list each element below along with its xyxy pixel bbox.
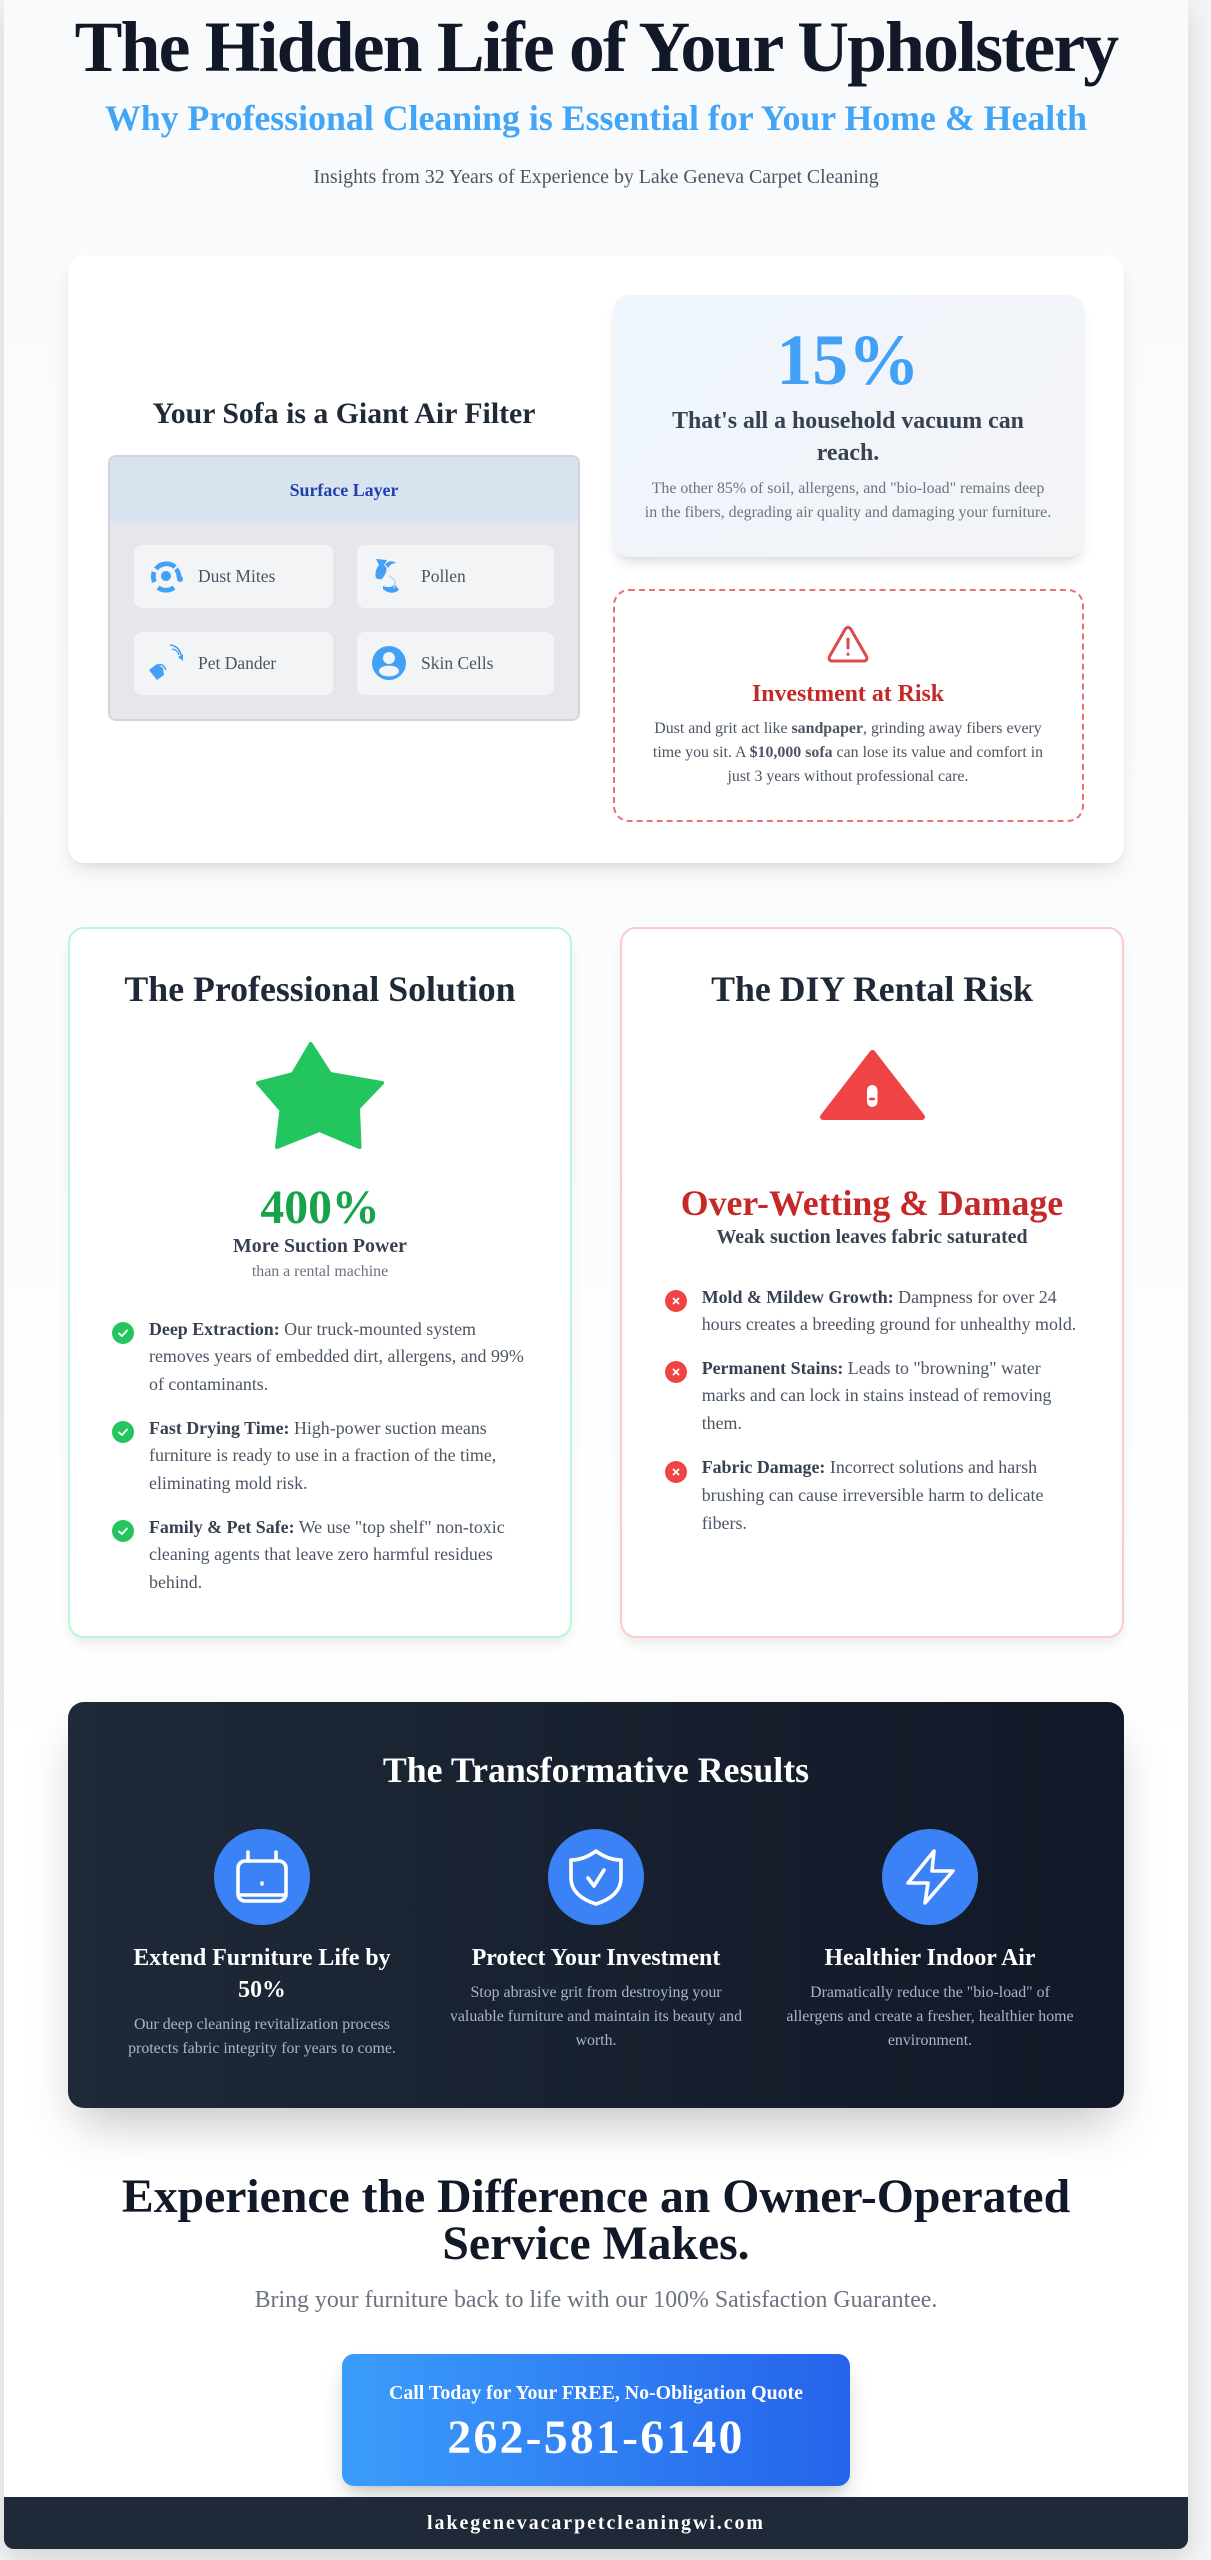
risk: mold and mildew [665, 1287, 1076, 1334]
stat label: More Suction Power [233, 1235, 407, 1257]
icon: star [256, 1042, 384, 1150]
result heading [133, 1944, 391, 2002]
item: skin cells: Skin Cells [421, 653, 493, 673]
callout text: Dust and grit act like sandpaper, grinding away fibers every [654, 720, 1042, 737]
risk: mold and mildew: Mold & Mildew Growth: Dampness for over 24 [702, 1287, 1057, 1307]
benefit: fast drying [112, 1418, 496, 1493]
footer [4, 2497, 1188, 2549]
result text: Our deep cleaning revitalization process [134, 2016, 390, 2033]
icon: warning triangle [820, 1050, 925, 1120]
icon: pollen [375, 559, 399, 593]
stat: over-wetting: Over-Wetting & Damage [681, 1183, 1063, 1223]
result text [128, 2016, 396, 2057]
tagline: Insights from 32 Years of Experience by Lake Geneva Carpet Cleaning [313, 166, 879, 188]
stat number: 15% [776, 321, 920, 400]
icon: cross [665, 1361, 687, 1383]
risk: fabric damage: brushing can cause irreversible harm to delicate [702, 1485, 1043, 1505]
risk: fabric damage [665, 1457, 1043, 1533]
stat description: in the fibers, degrading air quality and damaging your furniture. [645, 504, 1051, 521]
title: The Hidden Life of Your Upholstery [75, 8, 1117, 86]
result text: valuable furniture and maintain its beauty and [450, 2008, 742, 2025]
icon: skin cells [372, 646, 406, 680]
panel: transformative results [68, 1702, 1124, 2108]
callout text: time you sit. A $10,000 sofa can lose its value and comfort in [653, 744, 1043, 761]
icon: check [112, 1322, 134, 1344]
heading: sofa air filter: Your Sofa is a Giant Air Filter [153, 397, 535, 430]
surface layer header: Surface Layer [290, 480, 398, 500]
item: dust mites [134, 545, 333, 608]
item: pet dander: Pet Dander [198, 653, 276, 673]
stat heading [672, 408, 1024, 466]
icon: lightning bolt [882, 1829, 978, 1925]
risk: permanent stains: them. [702, 1413, 742, 1433]
icon: pet dander [149, 644, 183, 680]
diagram: sofa layers [108, 455, 580, 721]
benefit: family and pet safe: cleaning agents that leave zero harmful residues [149, 1544, 493, 1564]
heading: call to action: Experience the Difference an Owner-Operated [122, 2170, 1070, 2222]
result heading: Protect Your Investment [472, 1944, 720, 1970]
panel: air filter problem [68, 255, 1124, 863]
subtitle: Why Professional Cleaning is Essential for Your Home & Health [105, 98, 1087, 138]
icon: warning outline [828, 626, 868, 662]
benefit: deep extraction: of contaminants. [149, 1374, 268, 1394]
result: protect investment [450, 1829, 742, 2049]
heading: call to action: Service Makes. [442, 2216, 750, 2270]
item: pollen: Pollen [421, 566, 466, 586]
benefit: family and pet safe: behind. [149, 1572, 202, 1592]
result: healthier indoor air [786, 1829, 1074, 2049]
call to action button [342, 2354, 850, 2486]
icon: check [112, 1421, 134, 1443]
icon: calendar [214, 1829, 310, 1925]
icon: check [112, 1520, 134, 1542]
panel: diy rental risk [620, 927, 1124, 1638]
callout: investment at risk [612, 589, 1084, 822]
heading: professional solution: The Professional Solution [124, 969, 516, 1009]
benefit: deep extraction [112, 1319, 524, 1394]
risk: permanent stains: marks and can lock in stains instead of removing [702, 1385, 1051, 1405]
icon: shield check [548, 1829, 644, 1925]
stat heading: That's all a household vacuum can [672, 408, 1024, 434]
result text: Stop abrasive grit from destroying your [470, 1984, 722, 2001]
callout text: just 3 years without professional care. [728, 768, 968, 785]
item: dust mites: Dust Mites [198, 566, 275, 586]
phone number: 262-581-6140 [447, 2411, 745, 2464]
benefit: deep extraction: removes years of embedded dirt, allergens, and 99% [149, 1346, 524, 1366]
heading: diy rental risk: The DIY Rental Risk [711, 969, 1033, 1009]
benefit: family and pet safe: Family & Pet Safe: We use "top shelf" non-toxic [149, 1517, 505, 1537]
stat description [645, 480, 1051, 521]
stat card: 15 percent [612, 295, 1084, 557]
risk: permanent stains [665, 1358, 1052, 1433]
risk: fabric damage: fibers. [702, 1513, 747, 1533]
stat sublabel: than a rental machine [252, 1262, 388, 1280]
item: pet dander [134, 632, 333, 695]
callout text [653, 720, 1043, 785]
result: extend furniture life [128, 1829, 396, 2057]
result heading: 50% [238, 1976, 286, 2002]
icon: cross [665, 1461, 687, 1483]
button label: Call Today for Your FREE, No-Obligation Quote [389, 2382, 803, 2404]
risk: fabric damage: Fabric Damage: Incorrect solutions and harsh [702, 1457, 1037, 1477]
risk: permanent stains: Permanent Stains: Leads to "browning" water [702, 1358, 1041, 1378]
icon: cross [665, 1290, 687, 1312]
heading: transformative results: The Transformative Results [383, 1750, 809, 1790]
result text: environment. [888, 2032, 972, 2049]
panel: professional solution [68, 927, 572, 1638]
result text [786, 1984, 1074, 2049]
footer: lakegenevacarpetcleaningwi.com [427, 2512, 765, 2534]
result heading: Healthier Indoor Air [824, 1944, 1036, 1970]
result text: Dramatically reduce the "bio-load" of [810, 1984, 1050, 2001]
benefit: fast drying: furniture is ready to use in a fraction of the time, [149, 1445, 496, 1465]
text: guarantee: Bring your furniture back to life with our 100% Satisfaction Guarantee. [255, 2287, 937, 2313]
benefit: deep extraction: Deep Extraction: Our truck-mounted system [149, 1319, 476, 1339]
result heading: Extend Furniture Life by [133, 1944, 391, 1970]
benefit: fast drying: Fast Drying Time: High-power suction means [149, 1418, 487, 1438]
benefit: family and pet safe [112, 1517, 505, 1592]
result text: protects fabric integrity for years to come. [128, 2040, 396, 2057]
icon: dust mites [150, 561, 183, 593]
stat heading: reach. [817, 440, 879, 466]
item: skin cells [357, 632, 554, 695]
stat: 400 percent: 400% [260, 1181, 380, 1234]
result text: allergens and create a fresher, healthier home [786, 2008, 1074, 2025]
callout heading: Investment at Risk [752, 681, 944, 707]
heading: call to action [122, 2170, 1070, 2270]
result text [450, 1984, 742, 2049]
result text: worth. [575, 2032, 617, 2049]
stat description: The other 85% of soil, allergens, and "bio-load" remains deep [652, 480, 1044, 497]
risk: mold and mildew: hours creates a breeding ground for unhealthy mold. [702, 1314, 1076, 1334]
item: pollen [357, 545, 554, 608]
stat label: Weak suction leaves fabric saturated [716, 1226, 1028, 1248]
surface layer header [110, 457, 578, 523]
benefit: fast drying: eliminating mold risk. [149, 1473, 308, 1493]
